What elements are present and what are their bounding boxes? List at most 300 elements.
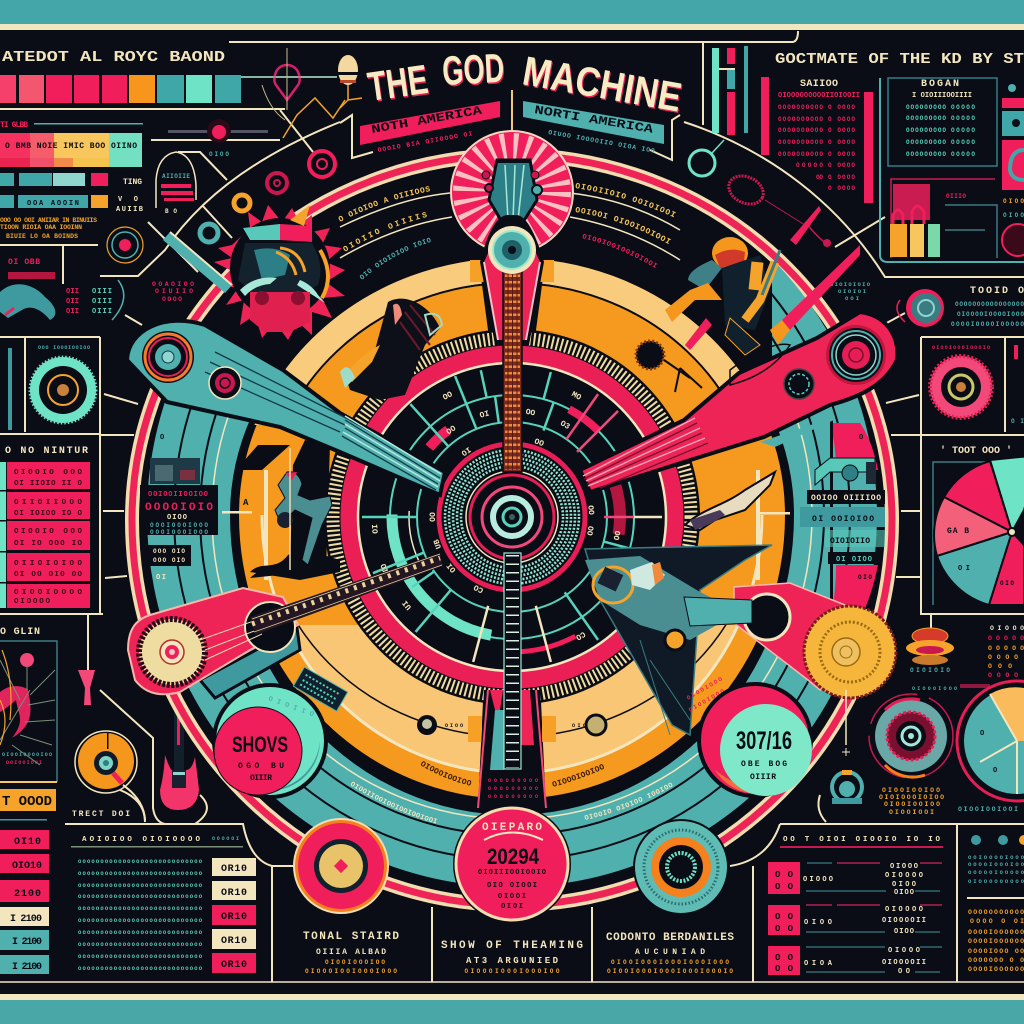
left list: I 2100 [12,962,42,973]
figure: guitarist [665,206,860,355]
panel: bottom left table: OOOOOOOOOOOOOOOOOOOOOOOOOOOO [78,941,203,948]
teal arm small dial [209,367,241,399]
text under guitar [686,675,726,714]
icon: orange node [234,195,250,211]
panel: bottom right notes: OOOOIOOOOOO [968,938,1024,945]
panel: left table: OIOOOO [14,598,50,606]
red callout text: OOAOIOO [152,281,194,288]
panel: bottom column one: OIOOOIOOIOOOIOOO [305,968,397,975]
panel: bottom right table: OIOA [804,960,833,968]
right side swatches: OIOO [1003,212,1024,219]
wheel glyphs: OI [460,446,474,459]
orange note: BIUIE LO OA BOINDS [6,233,78,240]
badge: centre year: 20294 [487,844,540,869]
text on lower orange bands: OIOOOIOOIOO [421,761,472,786]
badge: centre year: OIEPARO [482,822,542,834]
text on black upper rings: OOIOOI OIOOIOOIOOI [576,207,671,244]
right note: TOOID O [970,286,1024,297]
panel: bottom column three: AUCUNIAD [635,948,705,957]
panel: bottom column two: OIOOOIOOOIOOOIOO [464,968,560,975]
panel: bottom right notes: OOOOIOOOIOO [968,861,1024,868]
panel: bottom right notes: OOOO O OI [970,918,1024,925]
red arm small dial [784,369,814,399]
teal table: OOOOO [951,104,975,111]
panel: bottom left table: OOOOOOOOOOOOOOOOOOOOOOOOOOOO [78,882,203,889]
orange label bar [0,789,56,811]
panel: bottom right notes: OOOOIOOO OO [968,948,1024,955]
panel: bottom left table: OR10 [221,936,247,947]
panel: bottom right notes: OOOOOIOOOOO [968,869,1024,876]
top strip labels over disc: OIOOOIOOO [912,686,957,692]
panel: bottom right table: OIOO [804,919,832,927]
red table: SAIIOO [800,79,838,90]
red table: OOOOOOOOOO [778,116,823,123]
orange strips next to neck [468,260,556,742]
disc caption: OIOOIOOIOO [882,787,940,794]
text on black upper rings: OIOIIO OIIIIS [343,212,427,252]
panel: bottom right table: OIOOOO [885,906,923,914]
disc caption: OIOOIOOI [889,809,934,816]
lower guitar neck: OOOOOOOOO [488,778,538,784]
right teal band text blocks: OI OOIOIOO [812,515,874,524]
hatched ring [324,329,700,705]
halftone ring [435,440,589,594]
panel: bottom right table: OIOO [892,881,916,889]
panel: bottom left table: OOOOOOOOOOOOOOOOOOOOOOOOOOOO [78,870,203,877]
panel: bottom left table: OOOOOOOOOOOOOOOOOOOOOOOOOOOO [78,929,203,936]
red table: O OOOO [828,116,855,123]
neck dial [488,226,536,274]
small chord box [293,667,348,711]
panel: bottom left table [71,836,256,973]
data rows: TING [123,178,142,187]
wheel glyphs: OI [479,409,491,421]
stacked bar [0,133,142,167]
icon: orange dial [75,731,145,820]
badge: date [697,682,813,798]
data rows: V O [118,196,138,204]
wheel glyphs: OI [445,561,458,574]
wheel glyphs: MO [570,390,583,403]
red table: O OOOO [828,174,855,181]
right teal band text blocks: OIOIOIIO [830,537,870,546]
left list: OI10 [14,837,41,848]
red callout text [152,281,194,303]
pie chart panel: OIO [1000,580,1014,587]
red table: O OOOO [828,127,855,134]
badge: date: OBE BOG [741,760,787,769]
data rows: OOA AOOIN [27,200,79,208]
panel: left table: OI IO OOO IO [14,540,82,548]
lower guitar neck: OOOOOOOOO [488,794,538,800]
panel: bottom right table: OO [898,968,910,976]
circular core wheel [324,329,700,705]
title: THE [365,56,431,110]
panel: bottom column one: TONAL STAIRD [303,931,399,943]
text on lower teal band: OIOOIO OIOIOO IOOIOO [584,782,672,820]
orange note: OOO OO OOI ANIIAR IN BINUIIS [0,217,97,224]
panel: feather art [0,641,57,783]
hand with cuff [685,472,775,530]
panel: lower left mini chart: OIII [92,288,112,296]
teal table: OOOOO [951,127,975,134]
badge: shows: SHOVS [232,732,288,757]
panel: left table: OIOOIO OOO [14,469,82,477]
light bottom band [298,625,736,770]
wheel glyphs: OO [429,512,438,522]
small pie: O [993,767,997,775]
badge: date: OIOIOI [707,695,742,727]
radial spokes [362,370,662,667]
lower guitar neck: OOOOOOOOO [488,786,538,792]
panel: pink gear: OI [1011,418,1024,425]
panel: bottom column two: AT3 ARGUNIED [466,956,559,966]
bottom markers [417,715,606,735]
panel: bottom left table: OOOOOOOOOOOOOOOOOOOOOOOOOOOO [78,858,203,865]
panel: bottom column three [606,932,734,975]
panel: bottom column three: OIOOIOOOIOOOIOOOIOOO [611,959,729,966]
text on black upper rings: OIOOIIOIO OOIOIOOI [576,183,676,218]
panel: bottom right table: OIOOOO [885,872,923,880]
wheel glyphs: OO [445,424,458,437]
panel: top-left band stats [0,49,337,240]
wheel glyphs [371,390,630,642]
badge: centre year: OIO OIOOI [487,882,537,890]
wheel glyphs: OI [617,589,630,602]
icon: burger emblem [906,628,954,674]
teal table: OOOOO [951,139,975,146]
text on lower orange bands [421,761,604,786]
red table: O OOOO [828,162,855,169]
icon: red guitar [160,700,199,810]
panel: bottom right table: OIOO [894,889,914,897]
title: MACHINE [519,48,685,121]
figure: long haired musician [340,299,442,400]
colour swatches [0,75,337,103]
small pie [957,681,1024,801]
text block teal: OIOIOI [838,288,866,295]
pie chart panel [933,445,1024,605]
heading: left table: O NO NINTUR [5,446,88,457]
panel: pink gear: OIOOIOOOIOOOIO [932,345,990,351]
teal table: BOGAN [921,79,959,90]
right target icon [897,289,944,327]
bottom black gap around the neck [478,680,546,808]
small pie: O [980,730,984,738]
wheel glyphs: CO [472,582,485,594]
icon: target on left line [107,227,143,263]
teal table: OOOOOOOOO [906,104,946,111]
title: THE [366,58,432,111]
bottom markers: OIO [572,723,586,729]
heading: small left label: O GLIN [0,627,40,638]
small dark emblem right [636,341,702,392]
text on lower teal band [350,782,672,824]
right side notes: OOOOO [988,645,1024,652]
right teal band text blocks: OOIOO OIIIIOO [811,494,881,503]
panel: feather art: OOIOOIOOI [6,760,42,766]
red callout text: OOOO [162,296,182,303]
disc emblem [869,694,953,778]
red ring [349,354,675,680]
flying V guitar [585,545,772,735]
teal table: OOOOOOOOO [906,151,946,158]
text on black upper rings [338,183,676,280]
panel: bottom column three: CODONTO BERDANILES [606,932,734,944]
badge: centre year: OIOIIIOOIOOIO [478,869,546,877]
wheel glyphs: OO [585,505,595,516]
badge: centre year [453,805,571,923]
badge: shows: OIOIIO [267,695,315,719]
icon: red indicator [168,119,268,158]
red table: O OOOO [828,139,855,146]
orange ring [236,257,788,802]
panel: bottom left table: OR10 [221,960,247,971]
panel: bottom left table: OOOOOOOOOOOOOOOOOOOOOOOOOOOO [78,917,203,924]
left teal band text blocks: OOOIOOOIOOO [150,529,208,536]
red table: OOOOOOOOOO [778,139,823,146]
panel: bottom right table: OIOO [894,928,914,936]
disc caption: OIOOIOOIOOI [958,806,1018,813]
panel: bottom left table: OR10 [221,864,247,875]
right pink sections of the band [830,420,878,625]
panel: bottom right table: OO [775,870,794,880]
left teal band text blocks: OIOO [167,514,187,522]
panel: bottom right table: OO T OIOI OIOOIO IO IO [783,836,940,844]
text on black upper rings: OIO OIOIOIOO IOIO [360,238,431,280]
right side swatches [1002,84,1024,256]
badge: centre year: OIOI [501,903,523,911]
top strip labels over disc [912,684,990,692]
icon: small pin [78,670,95,705]
red table: O OOOO [828,185,855,192]
red table: O OOOO [828,151,855,158]
lower left arm [128,553,443,698]
wheel glyphs: OO [442,390,454,403]
text block teal: OIOIOIOIO [830,281,871,288]
panel: lower left mini chart: OII [66,308,79,316]
badge: date: 307/16 [736,727,792,755]
icon: burger emblem: OIOIOIO [910,667,950,674]
data rows: AUIIB [116,206,144,214]
sunburst with headstock [451,131,573,253]
panel: bottom right table: OO [775,953,794,963]
panel: bottom right table: OIOOOOII [882,917,926,925]
panel: lower left mini chart: OI OBB [8,258,40,267]
teal table: OOOOOOOOO [906,139,946,146]
panel: bottom right notes: OOOOIOOOOOO [968,966,1024,973]
pie chart panel: OI [958,565,970,573]
ring dividing lines [262,283,762,773]
right teal band text blocks: O [859,434,863,442]
panel: bottom left table: AOIOIOO OIOIOOOO [82,836,200,844]
text block teal [830,281,871,302]
wheel glyphs: CO [574,629,587,642]
text on black upper rings: OIOOIOOIOOIOIOOI [582,234,658,268]
panel: bottom column two [441,940,583,975]
wheel glyphs: OO [584,525,595,536]
gold coin [804,606,896,698]
right side notes: OOOOO [988,635,1024,642]
title [365,45,686,122]
label under dial: TRECT DOI [72,810,130,819]
panel: left table [0,446,90,608]
panel: bottom right table [768,836,943,976]
left teal band text blocks: OOOIOOOIOOO [150,522,208,529]
left list [0,819,49,974]
inner teal arcs [329,334,695,700]
teal table: OOOOOOOOO [906,115,946,122]
icon: red node [267,173,287,193]
guitar neck [250,553,443,635]
panel: bottom left table: OOOOOOOOOOOOOOOOOOOOOOOOOOOO [78,893,203,900]
stacked bar: O BMB NOIE IMIC BOO OIINO [5,142,137,151]
title: MACHINE [520,49,686,122]
wheel glyphs: OO [525,408,536,418]
panel: bottom right notes: OOOOIOOOOOO [968,929,1024,936]
red arm hub [826,325,886,385]
panel: bottom right notes: OOOOOOOOOOO [968,909,1024,916]
heading: left title: ATEDOT AL ROYC BAOND [2,49,225,66]
ribbon: right region: OIUOO IOOOOIIO OIOA IOO [548,129,655,155]
disc caption: OIOOIOOIOO [884,801,940,808]
panel: bottom left table: OR10 [221,912,247,923]
panel: mint gear [8,345,96,430]
wheel glyphs: OI [371,524,381,534]
right note [951,286,1024,328]
mint ring icon [689,140,724,176]
panel: bottom right notes: OIOOOOOOOOO [968,878,1024,885]
left list: 2100 [14,889,41,900]
panel: bottom left table: OOOOOOOOOOOOOOOOOOOOOOOOOOOO [78,953,203,960]
teal arm hub [142,331,194,383]
wheel glyphs: OO [533,437,545,449]
text on black upper rings: O OIOIOO A OIIIOOS [338,186,430,222]
orange label bar: T OOOD [2,794,52,810]
panel: bottom right notes: OOOOOOO O O [968,957,1024,964]
text block teal: OOI [845,295,859,302]
panel: bottom column two: SHOW OF THEAMING [441,940,583,952]
panel: bottom left table: OOOOOOOOOOOOOOOOOOOOOOOOOOOO [78,965,203,972]
orange note [0,217,97,240]
wheel glyphs: OO [381,455,393,468]
merch box [890,179,997,258]
panel: bottom column one: OIOOIOOOIOO [325,959,385,966]
panel: bottom right table: OO [775,924,794,934]
icon: lantern device [830,690,864,804]
figure: spiky creature [214,205,345,340]
wheel glyphs: UI [401,598,414,611]
badge: date: OIIIR [750,773,776,782]
data rows [0,173,144,214]
red table: OO [816,174,823,181]
red oval emblem [724,171,831,247]
right teal band text blocks: OIO [858,574,872,581]
ribbon: left region: OOOIO BIA OIIOOOO OI [377,130,473,154]
right note: OIOOOOIOOOOIOOO [957,311,1024,318]
right teal band text blocks [222,434,885,581]
badge: shows [212,683,328,799]
left teal band text blocks: A [243,498,249,508]
sliver under red arm [760,417,834,447]
panel: lower left mini chart: OIII [92,298,112,306]
left list: I 2100 [10,914,42,925]
red table: OOOOOOOOOO [778,127,823,134]
text under guitar: OIOOIOOO [688,687,726,714]
panel: bottom left table: OR10 [221,888,247,899]
teal table: OOOOOOOOO [906,127,946,134]
left teal band text blocks: OOIOOIIOOIOO [148,491,208,499]
right note: OOOOIOOOOIOOOOO [951,321,1024,328]
ribbon: right region: NORTI AMERICA [533,103,655,137]
title: GOD [442,46,506,95]
black wedge under teal arm [236,445,290,470]
orange note: TIOON RIOIA OAA IOOINN [0,224,82,231]
disc caption: OIOIOOOIOIOO [879,794,944,801]
red arm [580,312,897,492]
panel: bottom right table: OO [775,964,794,974]
badge: right ornate [633,819,729,915]
icon: red indicator: OIOO [209,151,229,158]
top cream border [0,24,1024,30]
panel: bottom right table: OIOOO [803,876,833,884]
left teal band text blocks: OOO OIO [153,557,185,564]
pointer bar teal [163,232,232,293]
bullseye [466,471,558,563]
wheel glyphs: O3 [558,419,571,432]
lower right arm [734,583,896,698]
heading: right title: GOCTMATE OF THE KD BY ST [775,51,1024,68]
left teal band text blocks: O [160,434,164,442]
left list: I 2100 [12,937,42,948]
left teal band text blocks: OOO OIO [153,548,185,555]
vertical bars [712,46,873,203]
wheel glyphs: IO [379,562,391,574]
panel: bottom right table: OIOOO [890,863,918,871]
icon: teal node [200,224,218,242]
panel: left table: OI IIOIO II O [14,480,82,488]
pie chart panel: GA B [947,527,969,536]
red table: OIOOOOOOOOOIIOIOOII [778,92,860,100]
panel: bottom left table: OOOOOI [212,836,239,842]
ribbon: left region [360,101,500,154]
top teal strip [0,0,1024,24]
left teal band text blocks: OI [156,574,166,582]
right side notes [988,625,1024,679]
text under guitar: OIOOIOOO [686,675,724,702]
panel: bottom right table: OIOOO [888,947,920,955]
text on lower orange bands: OIOOOIOOIOO [552,764,604,786]
wheel glyphs: UB [432,538,444,550]
teal table [888,78,997,166]
badge: left ornate [293,818,389,914]
upper guitar body and neck [480,215,544,472]
panel: bottom right table: OO [775,882,794,892]
right side swatches: OIOO [1003,198,1024,205]
icon: guitar pick [274,65,300,100]
panel: bottom left table: OOOOOOOOOOOOOOOOOOOOOOOOOOOO [78,905,203,912]
text on lower teal band: OIOOIIOOIOOIOOIOOIOOI [350,782,438,824]
red table: O OOOO [828,104,855,111]
black shadow behind climber [250,440,330,578]
panel: mint gear: OOO IOOOIOOIOO [38,345,90,351]
title: GOD [441,45,505,94]
panel: bottom right table: OO [775,912,794,922]
outer cream and red ring [132,155,892,905]
panel: lower left mini chart [0,246,142,325]
right note: OOOOOOOOOOOOOOOO [955,301,1024,308]
badge: centre year: OIOOI [498,893,526,901]
